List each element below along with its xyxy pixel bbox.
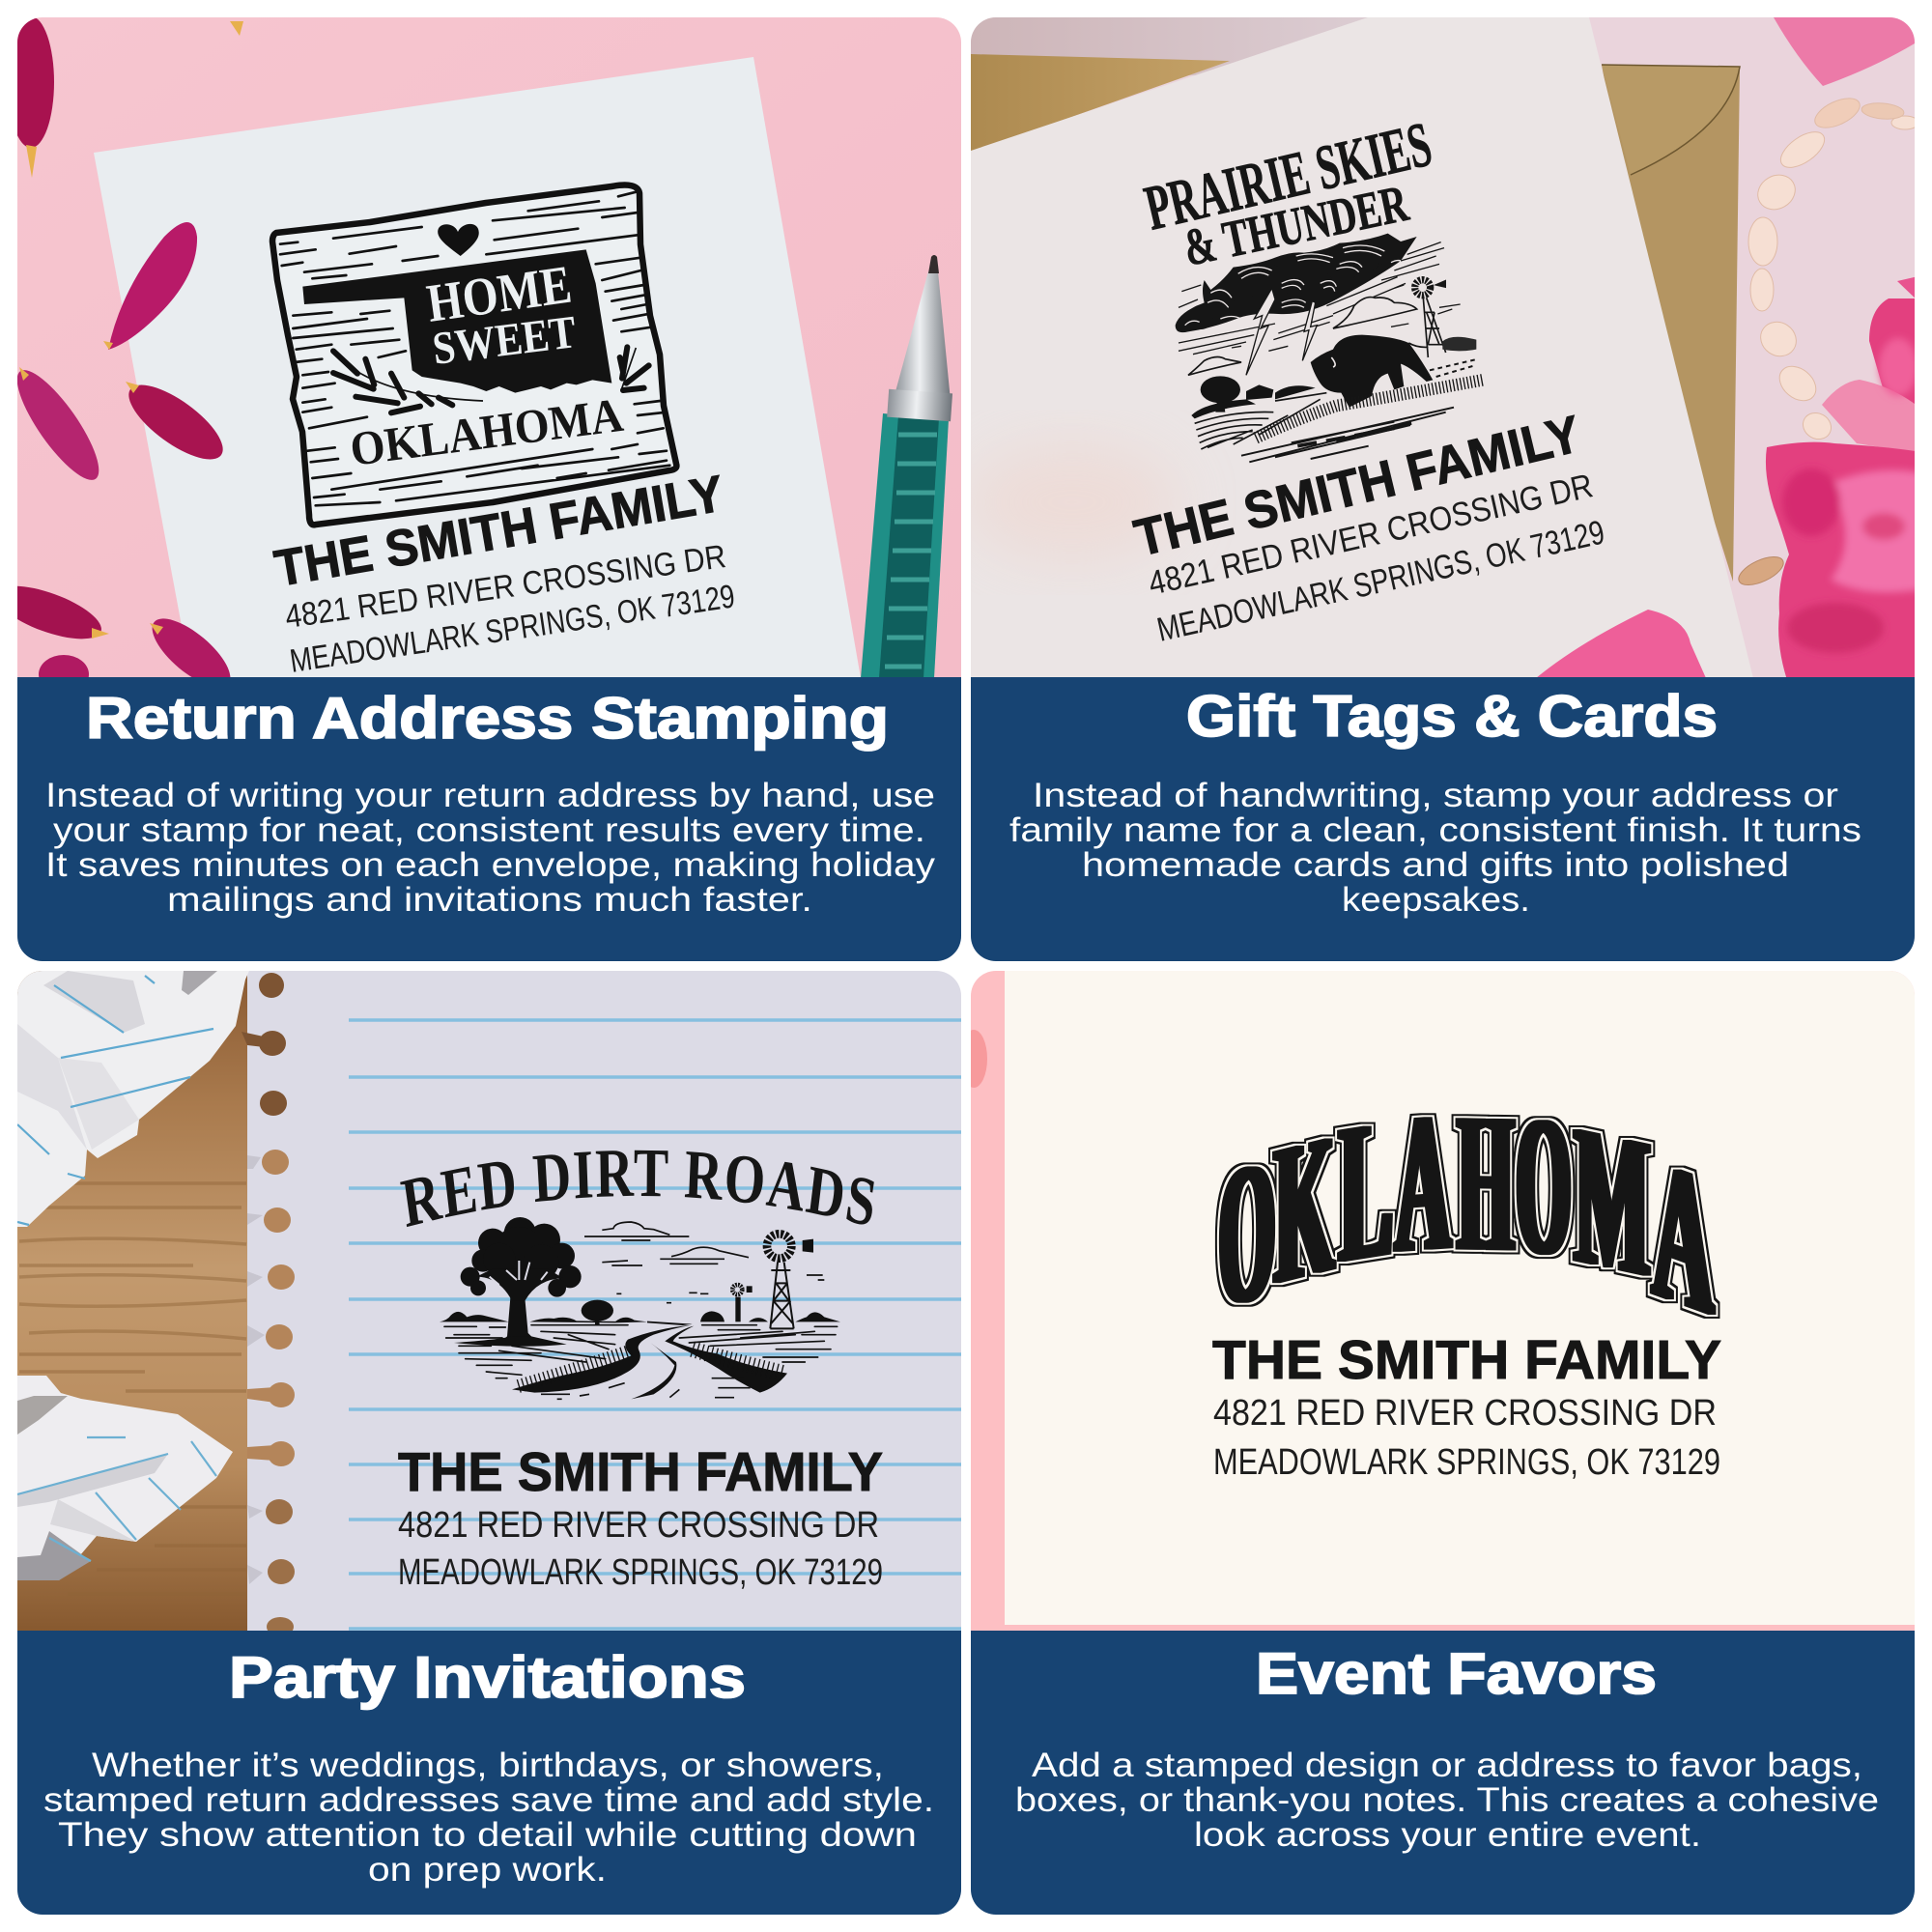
icon: heart bbox=[438, 224, 479, 256]
field hatching bbox=[444, 1325, 838, 1378]
kraft envelope bbox=[971, 54, 1740, 582]
plank outline bbox=[272, 185, 676, 525]
description: your stamp for neat, consistent results every time. bbox=[53, 811, 925, 849]
heading: Return Address Stamping bbox=[86, 686, 889, 751]
crumpled paper balls bbox=[17, 971, 249, 1580]
panel: event favors bbox=[960, 971, 1915, 1915]
description: look across your entire event. bbox=[1194, 1816, 1701, 1854]
caption band bbox=[17, 1631, 961, 1915]
stamp: prairie skies and thunder design bbox=[1139, 109, 1483, 462]
arched heading: RED DIRT ROADS bbox=[400, 1150, 874, 1227]
stamp text: home sweet: SWEET bbox=[430, 306, 579, 375]
stamp text: oklahoma: OKLAHOMA bbox=[347, 387, 626, 476]
icon: laurel leaves bbox=[333, 347, 649, 412]
stamp: arched Oklahoma lettering: A bbox=[1396, 1071, 1450, 1294]
tree and barn bbox=[1191, 376, 1316, 418]
stamp: arched Oklahoma lettering: M bbox=[1575, 1083, 1650, 1319]
stamp address text: MEADOWLARK SPRINGS, OK 73129 bbox=[1213, 1442, 1720, 1483]
icon: pearl bracelet bbox=[1735, 93, 1918, 591]
heading: Party Invitations bbox=[229, 1645, 746, 1710]
stamp address text: THE SMITH FAMILY bbox=[270, 465, 727, 598]
description: on prep work. bbox=[368, 1851, 607, 1889]
description: boxes, or thank-you notes. This creates a cohesive bbox=[1015, 1781, 1879, 1819]
photo: cream card on pink bbox=[960, 971, 1915, 1632]
stamp address text: THE SMITH FAMILY bbox=[398, 1441, 883, 1503]
Oklahoma state silhouette bbox=[302, 249, 611, 393]
stamp: wood plank Oklahoma design bbox=[272, 185, 676, 525]
heading: Gift Tags & Cards bbox=[1186, 684, 1718, 749]
description bbox=[1009, 777, 1861, 919]
stamp address text: 4821 RED RIVER CROSSING DR bbox=[1145, 467, 1596, 603]
stamp address text: MEADOWLARK SPRINGS, OK 73129 bbox=[1153, 513, 1608, 649]
description: family name for a clean, consistent finish. It turns bbox=[1009, 811, 1861, 849]
arched heading bbox=[400, 1150, 874, 1227]
stamp address text: MEADOWLARK SPRINGS, OK 73129 bbox=[288, 578, 737, 680]
field hatching bbox=[1195, 393, 1326, 449]
wood grain bbox=[19, 1183, 246, 1594]
bison bbox=[1311, 335, 1433, 408]
panel: gift tags and cards bbox=[966, 17, 1922, 961]
description: homemade cards and gifts into polished bbox=[1082, 846, 1789, 884]
stamp address text bbox=[270, 465, 737, 680]
description: It saves minutes on each envelope, making holiday bbox=[45, 846, 936, 884]
stamp: arched Oklahoma lettering: O bbox=[1219, 1114, 1275, 1351]
caption band bbox=[971, 1631, 1915, 1915]
description bbox=[45, 777, 936, 919]
stamp address text: THE SMITH FAMILY bbox=[1212, 1329, 1721, 1391]
stamp: arched Oklahoma lettering: O bbox=[1517, 1074, 1571, 1298]
stamp address text: MEADOWLARK SPRINGS, OK 73129 bbox=[398, 1552, 883, 1593]
description bbox=[43, 1747, 934, 1889]
notebook sheet bbox=[247, 971, 961, 1632]
stamp: arched Oklahoma lettering: K bbox=[1275, 1091, 1333, 1325]
windmill bbox=[1415, 280, 1446, 357]
icon: magenta petals bbox=[17, 17, 243, 677]
photo: paper on pink background bbox=[0, 16, 961, 698]
sky hatching bbox=[1179, 242, 1461, 355]
ruled lines bbox=[349, 1020, 961, 1629]
greeting card bbox=[971, 17, 1753, 678]
heading: Event Favors bbox=[1256, 1641, 1657, 1706]
stamp: red dirt roads design bbox=[400, 1150, 874, 1401]
stamp address text bbox=[1129, 405, 1608, 649]
small clouds bbox=[1188, 298, 1417, 375]
grass strokes bbox=[1256, 380, 1483, 438]
description: Instead of writing your return address by hand, use bbox=[45, 777, 935, 814]
stamp: prairie skies and thunder design: PRAIRIE SKIES bbox=[1139, 109, 1437, 244]
stamp text: home sweet: HOME bbox=[423, 255, 575, 334]
treeline bbox=[440, 1300, 840, 1325]
icon: teal pen bbox=[861, 255, 952, 678]
stamp: arched Oklahoma lettering bbox=[1219, 1071, 1713, 1358]
storm clouds bbox=[1176, 234, 1417, 332]
description: keepsakes. bbox=[1342, 881, 1530, 919]
distant hill bbox=[1442, 337, 1476, 351]
stamp address text: THE SMITH FAMILY bbox=[1129, 405, 1586, 568]
caption band bbox=[971, 677, 1915, 961]
spiral holes bbox=[242, 973, 295, 1636]
photo: card on envelope with flowers bbox=[966, 17, 1922, 686]
paper sheet bbox=[94, 57, 861, 678]
photo: notebook paper on wood bbox=[17, 971, 961, 1631]
wood grain bbox=[280, 191, 669, 505]
stamp address text: 4821 RED RIVER CROSSING DR bbox=[1213, 1393, 1717, 1434]
icon: pink peony flowers bbox=[1536, 17, 1922, 686]
description: stamped return addresses save time and add style. bbox=[43, 1781, 934, 1819]
description: Whether it’s weddings, birthdays, or showers, bbox=[92, 1747, 884, 1784]
stamp: prairie skies and thunder design: & THUNDER bbox=[1179, 174, 1413, 277]
foreground streaks bbox=[1241, 408, 1454, 462]
stamp: arched Oklahoma lettering: A bbox=[1653, 1118, 1713, 1358]
description: They show attention to detail while cutting down bbox=[58, 1816, 917, 1854]
description: Add a stamped design or address to favor bags, bbox=[1032, 1747, 1862, 1784]
stamp: arched Oklahoma lettering: H bbox=[1458, 1074, 1514, 1293]
lightning bolts bbox=[1246, 288, 1317, 375]
stamp text: home sweet bbox=[425, 267, 574, 363]
tree bbox=[454, 1217, 582, 1347]
small windmill bbox=[732, 1285, 753, 1321]
description: mailings and invitations much faster. bbox=[167, 881, 812, 919]
description bbox=[1015, 1747, 1879, 1854]
panel: party invitations bbox=[17, 971, 961, 1915]
winding road and grass bbox=[512, 1325, 787, 1399]
stamp address text bbox=[1212, 1329, 1721, 1483]
stamp address text: 4821 RED RIVER CROSSING DR bbox=[283, 538, 728, 636]
panel: return address stamping bbox=[0, 16, 961, 961]
cream card bbox=[1005, 971, 1915, 1625]
description: Instead of handwriting, stamp your address or bbox=[1033, 777, 1838, 814]
large windmill bbox=[767, 1234, 813, 1328]
caption band bbox=[17, 677, 961, 961]
stamp: arched Oklahoma lettering: L bbox=[1340, 1076, 1392, 1304]
stamp address text: 4821 RED RIVER CROSSING DR bbox=[398, 1505, 879, 1546]
cloud and sky strokes bbox=[584, 1222, 824, 1303]
stamp address text bbox=[398, 1441, 883, 1593]
